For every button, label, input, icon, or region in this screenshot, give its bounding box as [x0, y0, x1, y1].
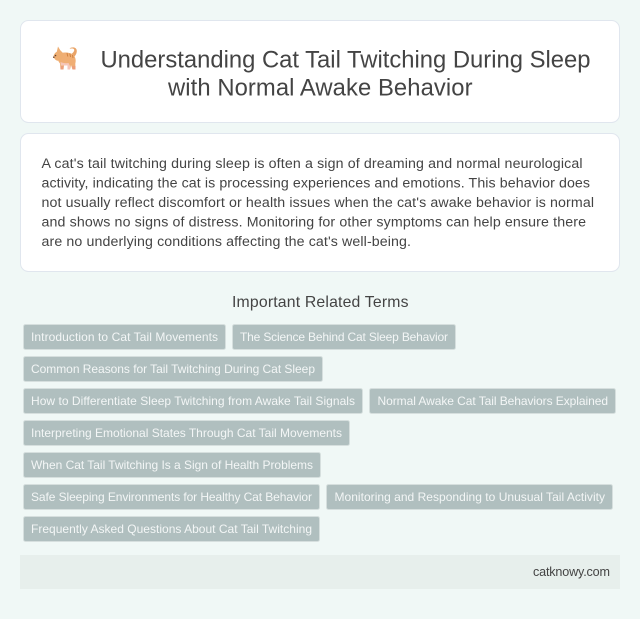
tag: science: The Science Behind Cat Sleep Behavior — [240, 330, 448, 344]
related terms tags — [24, 324, 616, 542]
tag: normal awake: Normal Awake Cat Tail Behaviors Explained — [378, 394, 608, 408]
panel: title card — [20, 20, 620, 122]
panel: summary paragraph: not usually reflect discomfort or health issues when the cat's awake behavior is normal — [42, 195, 594, 211]
title — [100, 46, 590, 102]
tag: normal awake — [370, 388, 616, 414]
tag: health problems: When Cat Tail Twitching Is a Sign of Health Problems — [31, 458, 313, 472]
panel: summary paragraph: and shows no signs of distress. Monitoring for other symptoms can help ensure there — [42, 214, 586, 230]
tag: safe sleeping: Safe Sleeping Environments for Healthy Cat Behavior — [31, 490, 312, 504]
tag: common reasons — [24, 356, 322, 382]
title: Understanding Cat Tail Twitching During Sleep — [100, 46, 590, 74]
tag: introduction: Introduction to Cat Tail Movements — [31, 330, 218, 344]
tag: faq: Frequently Asked Questions About Cat Tail Twitching — [31, 522, 312, 536]
tag: differentiate — [24, 388, 362, 414]
panel: summary paragraph: are no underlying conditions affecting the cat's well-being. — [42, 234, 411, 250]
panel: summary paragraph: A cat's tail twitching during sleep is often a sign of dreaming and normal neurological — [42, 156, 582, 172]
footer — [20, 555, 620, 589]
footer: catknowy.com — [533, 565, 610, 579]
panel: summary paragraph: activity, indicating the cat is processing experiences and emotions. This behavior does — [42, 176, 590, 192]
icon: cat — [53, 46, 77, 70]
tag: common reasons: Common Reasons for Tail Twitching During Cat Sleep — [31, 362, 315, 376]
tag: health problems — [24, 452, 320, 478]
tag: differentiate: How to Differentiate Sleep Twitching from Awake Tail Signals — [31, 394, 355, 408]
tag: safe sleeping — [24, 484, 320, 510]
tag: faq — [24, 516, 320, 542]
tag: introduction — [24, 324, 226, 350]
panel: summary paragraph — [20, 134, 620, 272]
heading: related terms: Important Related Terms — [232, 294, 409, 311]
tag: science — [232, 324, 456, 350]
tag: emotional states: Interpreting Emotional States Through Cat Tail Movements — [31, 426, 342, 440]
title: with Normal Awake Behavior — [167, 75, 473, 102]
tag: monitoring: Monitoring and Responding to Unusual Tail Activity — [334, 490, 605, 504]
tag: emotional states — [24, 420, 350, 446]
tag: monitoring — [326, 484, 612, 510]
